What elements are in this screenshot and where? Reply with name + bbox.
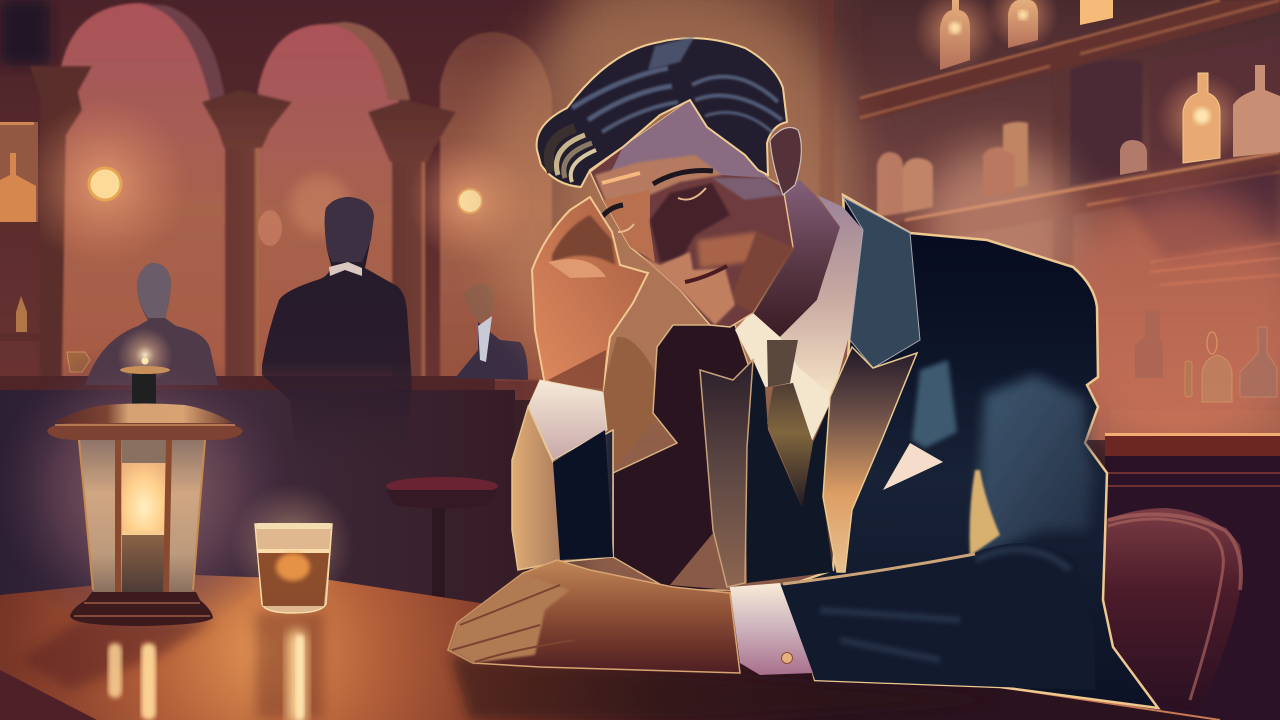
- hair strands: [572, 68, 782, 132]
- forehead purple: [608, 100, 768, 178]
- lantern shadow on table: [20, 620, 215, 690]
- forehead highlight: [602, 173, 640, 183]
- finger lines: [452, 585, 575, 662]
- man: navy sleeve: [553, 430, 613, 560]
- patron: standing from behind: [262, 197, 412, 470]
- chair: [1100, 508, 1242, 712]
- lower face lit: [640, 252, 735, 325]
- man: ear: [770, 128, 801, 195]
- man: belly light triangle: [670, 533, 730, 590]
- thumb: [548, 259, 606, 278]
- fingers tan: [448, 574, 570, 663]
- temple shade: [712, 178, 783, 200]
- right wall glow: [1050, 190, 1280, 450]
- closed eyes: [618, 188, 706, 232]
- bar counter left: [0, 352, 515, 605]
- bar stool: [386, 477, 498, 598]
- man: tan sleeve: [512, 407, 613, 570]
- man: resting hand: [448, 560, 740, 673]
- background: centre wall: [565, 0, 825, 620]
- man: background gap tan: [603, 337, 663, 470]
- left shelf with bottles: [0, 122, 44, 341]
- background: right wall: [800, 0, 1280, 440]
- man: sleeve fold highlight: [974, 375, 1092, 555]
- table reflections: [108, 612, 324, 720]
- man: neck: [753, 180, 840, 337]
- eye socket lit: [603, 190, 655, 262]
- man: forearm on table: [780, 543, 1095, 690]
- background: arches and columns: [30, 3, 552, 380]
- man: tie: [767, 340, 813, 507]
- lantern base: [70, 592, 213, 626]
- man: pocket square: [883, 443, 943, 490]
- forehead lit: [595, 155, 722, 212]
- lantern body: [78, 440, 205, 592]
- hand shadow on table: [450, 655, 1000, 720]
- man: hair: [537, 36, 787, 187]
- man: yellow edge light: [970, 470, 1000, 556]
- hair curl: [549, 128, 596, 182]
- patron: right seated: [455, 284, 528, 380]
- bar counter right: [1105, 433, 1280, 720]
- lantern dome: [53, 404, 233, 423]
- table: [0, 575, 1220, 720]
- man: sleeve folds: [820, 550, 1070, 660]
- patron: left seated: [85, 263, 218, 385]
- brows and eyes: [602, 171, 713, 217]
- man: lapel left: [700, 360, 753, 587]
- shoulder glow: [920, 145, 1080, 305]
- background: left wall: [0, 0, 600, 400]
- man: chest slate panel: [912, 360, 957, 448]
- table lantern: [0, 327, 295, 640]
- man: shirt collar right: [780, 195, 863, 397]
- man: [448, 36, 1158, 708]
- lantern aura: [0, 340, 295, 640]
- man: vest: [745, 360, 833, 583]
- right wall shelves: [820, 0, 1280, 434]
- hair top sheen: [648, 36, 695, 70]
- man: jacket right side: [790, 195, 1158, 708]
- lantern flame: [117, 327, 173, 383]
- lantern rim: [47, 423, 243, 440]
- column: left: [30, 66, 92, 380]
- bottles on right shelves: [877, 0, 1280, 402]
- man: raised cuff: [528, 380, 607, 460]
- man: lower lapel right: [823, 347, 917, 572]
- man: shirt front: [735, 250, 860, 445]
- wrist shadow: [548, 350, 606, 395]
- wall lamps: [20, 99, 532, 269]
- table edge highlight: [1000, 687, 1220, 720]
- jaw: [730, 232, 795, 313]
- nose shadow: [650, 183, 730, 262]
- cheek light: [697, 232, 757, 268]
- man: resting cuff: [730, 583, 813, 675]
- halo around man: [480, 0, 860, 400]
- column: right: [368, 100, 456, 378]
- mouth: [685, 266, 727, 282]
- finger shadow: [552, 215, 615, 265]
- face base: [590, 100, 793, 327]
- column: middle: [202, 90, 292, 380]
- table front corner: [0, 670, 97, 720]
- dark shelf recess: [1120, 168, 1280, 258]
- man: torso dark: [613, 325, 760, 590]
- bar mug: [67, 352, 90, 372]
- man: raised hand: [532, 197, 648, 395]
- whisky glass: [230, 483, 354, 613]
- man: upper lapel: [843, 197, 920, 368]
- man: head: [590, 100, 795, 327]
- man: cufflink: [782, 652, 792, 664]
- top left dark corner: [0, 0, 50, 65]
